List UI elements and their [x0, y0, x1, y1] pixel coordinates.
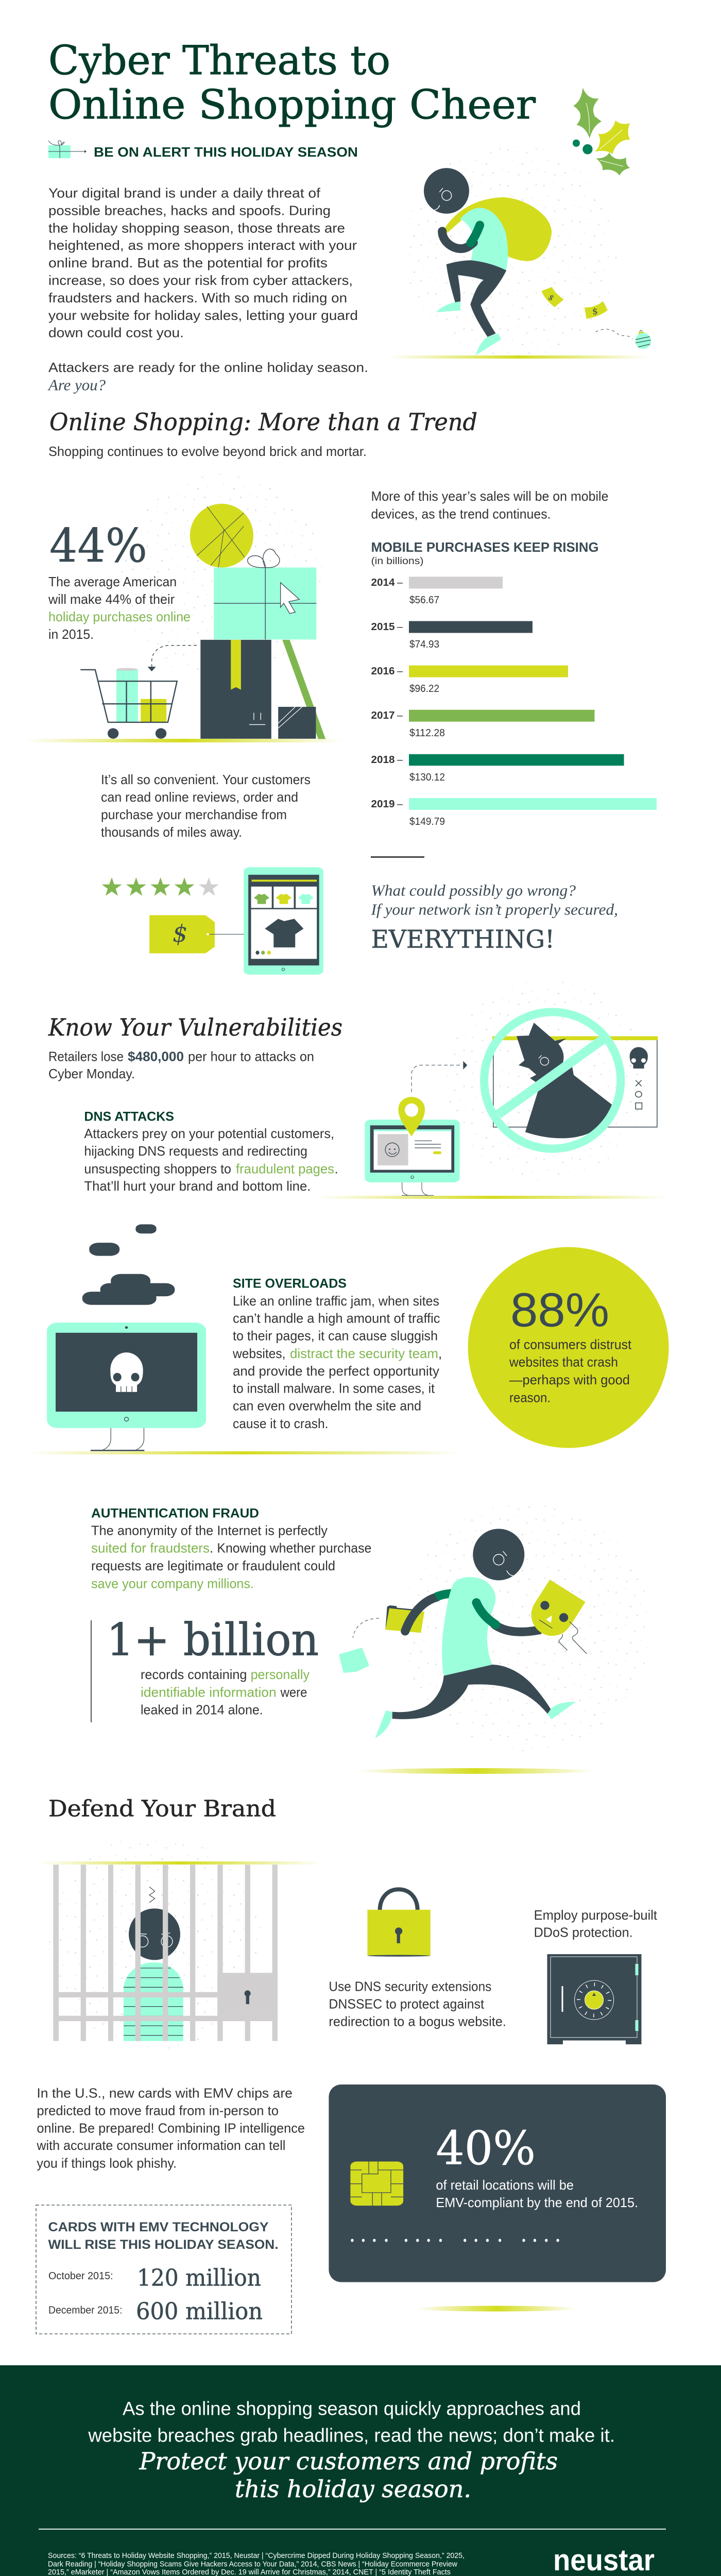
ground shadow: [356, 1768, 595, 1774]
bar 2015: 2015: [371, 621, 394, 633]
icon: skull: [110, 1352, 143, 1392]
panel: 88% stat circle: —perhaps with good: [509, 1372, 630, 1387]
bar 2018: –: [397, 754, 403, 766]
icon: gift with arrow: [48, 141, 87, 158]
heading: know your vulnerabilities: Know Your Vulnerabilities: [48, 1013, 342, 1041]
intro text: Your digital brand is under a daily threat of: [48, 185, 321, 201]
bar 2014: $56.67: [409, 595, 439, 606]
bar 2017: 2017: [371, 710, 394, 721]
text: DNS attacks: hijacking DNS requests and redirecting: [84, 1143, 307, 1159]
text: EMV prediction: In the U.S., new cards with EMV chips are: [37, 2086, 293, 2101]
icon: tablet: [244, 867, 323, 975]
figure: thief: [424, 168, 552, 355]
icon: mint gift box: [214, 549, 316, 639]
text: DDoS: Employ purpose-built: [534, 1907, 658, 1923]
closing message: website breaches grab headlines, read the news; don’t make it.: [88, 2425, 615, 2446]
illustration: thief with sack: $: [592, 306, 598, 317]
stat: 44%: will make 44% of their: [48, 591, 175, 607]
text: retailers lose: Retailers lose: [48, 1048, 124, 1064]
text: DNSSEC: redirection to a bogus website.: [329, 2013, 506, 2029]
callout: what could go wrong: If your network isn’t properly secured,: [370, 901, 618, 919]
panel: EMV card stats: CARDS WITH EMV TECHNOLOGY: [48, 2220, 269, 2234]
text: convenience: purchase your merchandise from: [101, 807, 287, 822]
card number dots: [351, 2239, 559, 2242]
panel: EMV card stats: 600 million: [136, 2298, 263, 2325]
text: DNSSEC: Use DNS security extensions: [329, 1978, 491, 1994]
intro text: Are you?: [47, 376, 106, 394]
panel: EMV card stats: 120 million: [137, 2264, 261, 2292]
bar 2015: –: [397, 621, 403, 633]
bar 2017: [371, 710, 594, 739]
text: EMV prediction: with accurate consumer information can tell: [36, 2138, 285, 2153]
text: DNS attacks: That’ll hurt your brand and bottom line.: [84, 1178, 311, 1194]
icon: ball: [190, 504, 253, 568]
text: authentication fraud: AUTHENTICATION FRAUD: [91, 1506, 259, 1520]
text: site overloads: can even overwhelm the site and: [233, 1398, 421, 1413]
stat: 1+ billion: leaked in 2014 alone.: [141, 1702, 263, 1717]
text: authentication fraud: requests are legitimate or fraudulent could: [91, 1558, 335, 1573]
bar 2017: $112.28: [409, 727, 445, 739]
text: site overloads: Like an online traffic jam, when sites: [233, 1293, 439, 1309]
stat: 1+ billion: personally: [251, 1667, 310, 1682]
icon: stars: [101, 877, 219, 896]
bar 2014: –: [397, 577, 403, 588]
text: DNSSEC: [329, 1978, 506, 2029]
ground line: [25, 739, 342, 742]
text: authentication fraud: .: [210, 1540, 213, 1556]
dashed trail: [353, 1618, 379, 1638]
stat: 40%: EMV-compliant by the end of 2015.: [436, 2195, 638, 2210]
text: retailers lose: [48, 1048, 314, 1081]
closing message: [88, 2398, 615, 2503]
figure: prisoner: [124, 1887, 183, 2041]
cell bars: [53, 1865, 278, 2041]
text: retailers lose: Cyber Monday.: [48, 1066, 135, 1081]
closing message: As the online shopping season quickly approaches and: [123, 2398, 581, 2419]
sources: Sources: “6 Threats to Holiday Website Shopping,” 2015, Neustar | “Cybercrime Dipped During Holiday Shopping Season,” 2025,: [48, 2551, 465, 2560]
intro text: the holiday shopping season, those threats are: [48, 220, 345, 235]
text: site overloads: ,: [438, 1346, 442, 1361]
text: site overloads: to their pages, it can cause sluggish: [233, 1328, 438, 1344]
stat: 40%: 40%: [436, 2121, 536, 2175]
stat: 1+ billion: [91, 1615, 319, 1722]
bar 2015: $74.93: [409, 639, 439, 650]
illustration: crashed monitor: [28, 1224, 460, 1454]
ground line: [28, 1451, 460, 1454]
text: DNS attacks: fraudulent pages: [236, 1161, 334, 1177]
sub text: Shopping continues to evolve beyond brick and mortar.: [48, 444, 367, 459]
text: convenience: can read online reviews, order and: [101, 789, 298, 805]
figure: hooded attacker: [517, 1023, 612, 1138]
closing message: this holiday season.: [235, 2475, 471, 2503]
icon: folder: [385, 1605, 424, 1633]
bar 2019: –: [397, 799, 403, 810]
bar chart: mobile purchases: [371, 539, 657, 827]
heading: defend your brand: Defend Your Brand: [48, 1796, 276, 1822]
icon: safe: [547, 1954, 642, 2044]
ground shadow: [416, 2306, 577, 2311]
figure: runner: [375, 1529, 576, 1738]
icon: malicious window: [492, 1036, 658, 1127]
intro text: online brand. But as the potential for profits: [48, 255, 328, 270]
panel: 88% stat circle: [468, 1247, 669, 1448]
title: [48, 38, 536, 128]
bar 2016: 2016: [371, 666, 394, 677]
illustration: jailed attacker: [39, 1835, 322, 2049]
icon: location pin: [398, 1097, 425, 1137]
stat: 1+ billion: records containing: [141, 1667, 247, 1682]
text: EMV prediction: [36, 2086, 305, 2171]
panel: 88% stat circle: 88%: [510, 1283, 609, 1337]
arrow: dashed redirect: [411, 1061, 467, 1092]
text: mobile intro: More of this year’s sales will be on mobile: [371, 488, 609, 504]
intro text: increase, so does your risk from cyber attackers,: [48, 273, 353, 288]
text: EMV prediction: online. Be prepared! Combining IP intelligence: [37, 2121, 305, 2136]
heading: online shopping: Online Shopping: More than a Trend: [49, 408, 477, 436]
bar 2014: 2014: [371, 577, 395, 588]
icon: monitor: [47, 1323, 206, 1450]
text: retailers lose: $480,000: [128, 1048, 184, 1064]
text: site overloads: can’t handle a high amount of traffic: [233, 1311, 440, 1326]
text: site overloads: [232, 1277, 442, 1431]
panel: footer: [0, 2365, 721, 2576]
callout: what could go wrong: [370, 856, 618, 954]
text: DNSSEC: DNSSEC to protect against: [329, 1996, 485, 2011]
bar 2017: –: [397, 710, 403, 721]
text: site overloads: and provide the perfect opportunity: [233, 1363, 439, 1379]
bar 2019: 2019: [371, 799, 394, 810]
stat: 40%: [436, 2121, 638, 2210]
icon: green stick: [282, 640, 325, 739]
panel: EMV card stats: October 2015:: [48, 2270, 113, 2282]
illustration: gifts and shopping cart: [25, 474, 342, 742]
text: mobile intro: devices, as the trend continues.: [371, 506, 551, 521]
text: retailers lose: per hour to attacks on: [188, 1048, 314, 1064]
callout: what could go wrong: EVERYTHING!: [371, 925, 555, 954]
text: EMV prediction: you if things look phishy.: [37, 2155, 177, 2171]
intro text: your website for holiday sales, letting your guard: [48, 308, 358, 323]
text: DDoS: DDoS protection.: [534, 1925, 633, 1940]
icon: holly leaves: [573, 88, 630, 176]
bar 2018: [371, 754, 624, 783]
illustration: thief with sack: [388, 88, 651, 359]
closing message: Protect your customers and profits: [139, 2447, 558, 2475]
illustration: thief with sack: $: [546, 293, 556, 303]
icon: user monitor: [365, 1120, 460, 1195]
icon: card chip: [350, 2161, 403, 2206]
text: site overloads: to install malware. In some cases, it: [233, 1381, 435, 1396]
stat: 40%: of retail locations will be: [436, 2177, 574, 2193]
icon: cart: [80, 668, 177, 739]
illustration: DNS hijack: [317, 980, 667, 1199]
chart title: [371, 539, 598, 567]
illustration: running fraudster: [339, 1503, 650, 1774]
stat: 44%: in 2015.: [48, 626, 94, 642]
text: DNS attacks: unsuspecting shoppers to: [84, 1161, 231, 1177]
illustration: rating, price tag and tablet: [101, 867, 323, 975]
text: DNS attacks: Attackers prey on your potential customers,: [84, 1126, 334, 1141]
stat: 1+ billion: 1+ billion: [107, 1615, 319, 1666]
text: site overloads: cause it to crash.: [233, 1416, 329, 1431]
ground line: [388, 355, 648, 359]
intro text: down could cost you.: [48, 325, 184, 341]
ground line: [317, 1196, 667, 1199]
text: convenience: thousands of miles away.: [101, 824, 242, 840]
text: site overloads: distract the security team: [290, 1346, 438, 1361]
bar 2019: [371, 798, 657, 827]
stat: 44%: [48, 519, 191, 642]
text: DDoS: [534, 1907, 658, 1940]
panel: 88% stat circle: reason.: [509, 1389, 551, 1405]
text: convenience: [101, 772, 311, 840]
stat: 1+ billion: identifiable information: [141, 1685, 277, 1700]
sources: Dark Reading | “Holiday Shopping Scams Give Hackers Access to Your Data,” 2014, CBS News | “Holiday Ecommerce Preview: [48, 2560, 457, 2568]
icon: price tag: [149, 915, 263, 953]
text: EMV prediction: predicted to move fraud from in-person to: [37, 2103, 279, 2119]
icon: mask: [531, 1580, 587, 1654]
text: mobile intro: [371, 488, 609, 521]
illustration: rating, price tag and tablet: $: [173, 920, 187, 947]
text: authentication fraud: suited for fraudsters: [91, 1540, 210, 1556]
text: site overloads: websites,: [232, 1346, 285, 1361]
text: DNS attacks: DNS ATTACKS: [84, 1110, 174, 1124]
intro text: fraudsters and hackers. With so much riding on: [48, 290, 347, 306]
icon: ornament: [596, 329, 651, 349]
intro text: [47, 185, 368, 394]
sources: [48, 2551, 465, 2576]
text: authentication fraud: The anonymity of the Internet is perfectly: [91, 1523, 328, 1538]
text: site overloads: SITE OVERLOADS: [233, 1277, 347, 1291]
bar 2015: [371, 621, 533, 650]
icon: prohibition sign: [484, 1012, 621, 1149]
panel: credit card: [329, 2084, 666, 2282]
icon: cell lock keyhole: [245, 1990, 251, 2004]
bar 2016: [371, 666, 568, 694]
bar 2016: –: [397, 666, 403, 677]
panel: EMV card stats: December 2015:: [48, 2305, 123, 2316]
text: DNS attacks: [84, 1110, 338, 1194]
text: authentication fraud: Knowing whether purchase: [217, 1540, 371, 1556]
panel: 88% stat circle: of consumers distrust: [509, 1337, 632, 1352]
intro text: heightened, as more shoppers interact with your: [48, 238, 357, 253]
panel: EMV card stats: [36, 2205, 291, 2334]
icon: dropped card: [339, 1648, 369, 1673]
bar 2018: 2018: [371, 754, 394, 766]
bar 2016: $96.22: [409, 683, 439, 694]
title: Cyber Threats to: [48, 38, 390, 84]
chart title: (in billions): [371, 556, 423, 567]
text: authentication fraud: [91, 1506, 371, 1591]
icon: skull and controls: [630, 1047, 648, 1109]
bar 2018: $130.12: [409, 772, 445, 783]
ground line: [39, 1861, 322, 1865]
icon: smoke clouds: [82, 1224, 175, 1305]
chart title: MOBILE PURCHASES KEEP RISING: [371, 539, 598, 555]
intro text: possible breaches, hacks and spoofs. During: [48, 202, 331, 218]
title: Online Shopping Cheer: [48, 82, 536, 128]
subtitle: BE ON ALERT THIS HOLIDAY SEASON: [94, 144, 358, 160]
callout: what could go wrong: What could possibly go wrong?: [371, 882, 576, 900]
panel: 88% stat circle: websites that crash: [509, 1354, 618, 1370]
bar 2019: $149.79: [409, 816, 445, 827]
stat: 44%: The average American: [48, 574, 177, 589]
panel: EMV card stats: WILL RISE THIS HOLIDAY SEASON.: [48, 2238, 278, 2252]
text: convenience: It’s all so convenient. Your customers: [101, 772, 311, 787]
icon: padlock: [367, 1889, 431, 1957]
stat: 44%: holiday purchases online: [48, 609, 191, 624]
arrow: into cart: [148, 646, 197, 671]
bar 2014: [371, 577, 503, 606]
icon: dark boxes: [200, 640, 316, 739]
text: DNS attacks: .: [335, 1161, 338, 1177]
icon: falling money: [542, 287, 608, 319]
text: authentication fraud: save your company millions.: [91, 1575, 254, 1591]
stat: 44%: 44%: [49, 519, 147, 573]
stat: 1+ billion: were: [280, 1685, 307, 1700]
intro text: Attackers are ready for the online holiday season.: [48, 360, 368, 375]
